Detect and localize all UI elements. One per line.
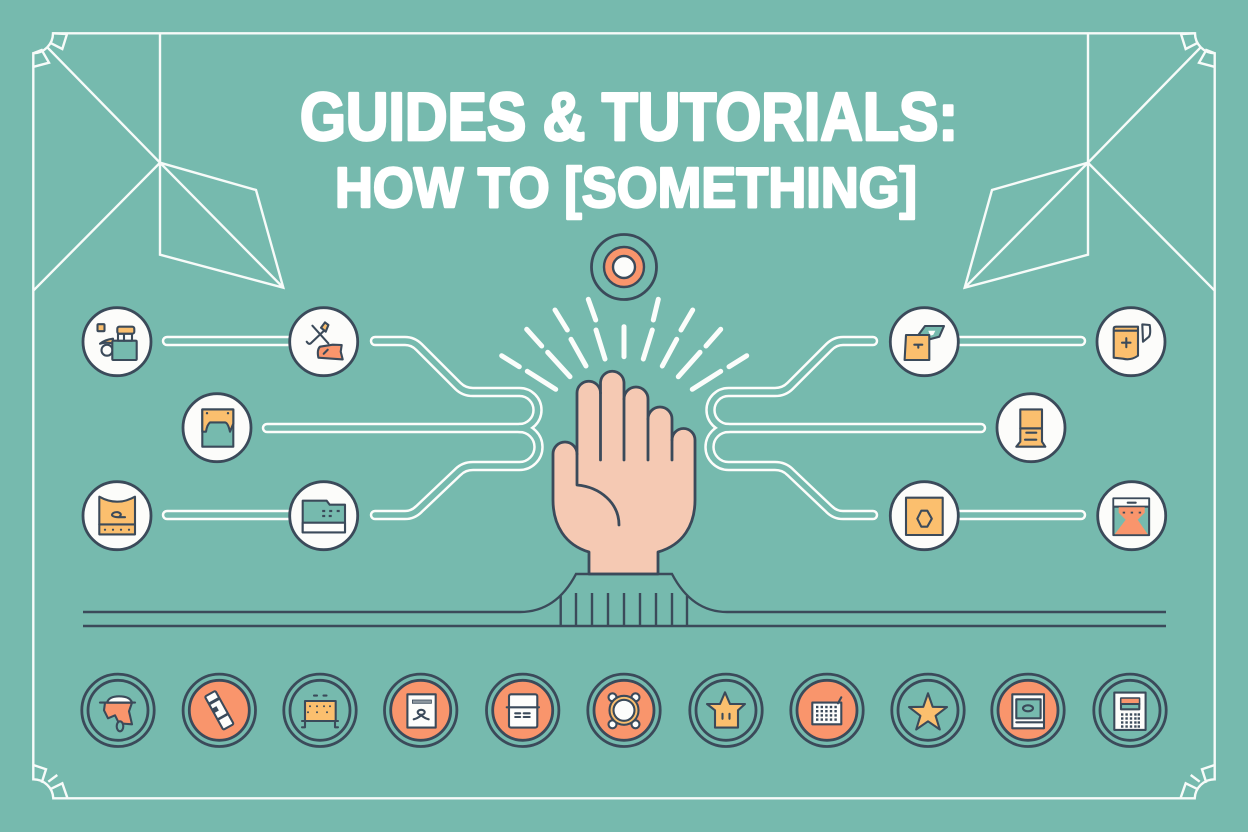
icon: crossed tools and orange blob bbox=[290, 308, 358, 376]
badge: ring with nodes bbox=[588, 674, 660, 746]
icon: arch card bbox=[183, 394, 251, 462]
badge: keyboard bbox=[791, 674, 863, 746]
badge: calculator bbox=[1094, 674, 1166, 746]
sleeve and ground lines bbox=[83, 574, 1166, 626]
icon: book stand bbox=[997, 394, 1065, 462]
right connectors bbox=[710, 341, 1081, 515]
title line one: GUIDES & TUTORIALS: bbox=[300, 79, 958, 155]
badge: calculator card bbox=[486, 674, 559, 746]
title line two: HOW TO [SOMETHING] bbox=[335, 156, 917, 220]
icon: folder bbox=[290, 482, 358, 550]
icon: jar and cup bbox=[83, 308, 151, 376]
raised hand bbox=[553, 371, 695, 574]
left connectors bbox=[167, 341, 538, 515]
badge: tube bbox=[183, 674, 256, 746]
icon: hourglass frame bbox=[1098, 482, 1166, 550]
icon row bbox=[82, 674, 1166, 746]
badge: document with person bbox=[384, 674, 457, 746]
radiating light rays bbox=[502, 299, 747, 389]
badge: crown basket bbox=[690, 674, 762, 746]
icon: mug with plus bbox=[1097, 308, 1165, 376]
badge: helmet bbox=[82, 674, 154, 746]
icon: yellow square with hexagon bbox=[890, 482, 958, 550]
title bbox=[300, 79, 958, 220]
icon: yellow bag with swirl bbox=[83, 482, 151, 550]
icon: target above hand bbox=[592, 234, 656, 300]
icon: open yellow box bbox=[890, 308, 958, 376]
badge: yellow bench bbox=[284, 674, 356, 746]
badge: picture frame bbox=[992, 674, 1064, 746]
badge: star bbox=[892, 674, 964, 746]
